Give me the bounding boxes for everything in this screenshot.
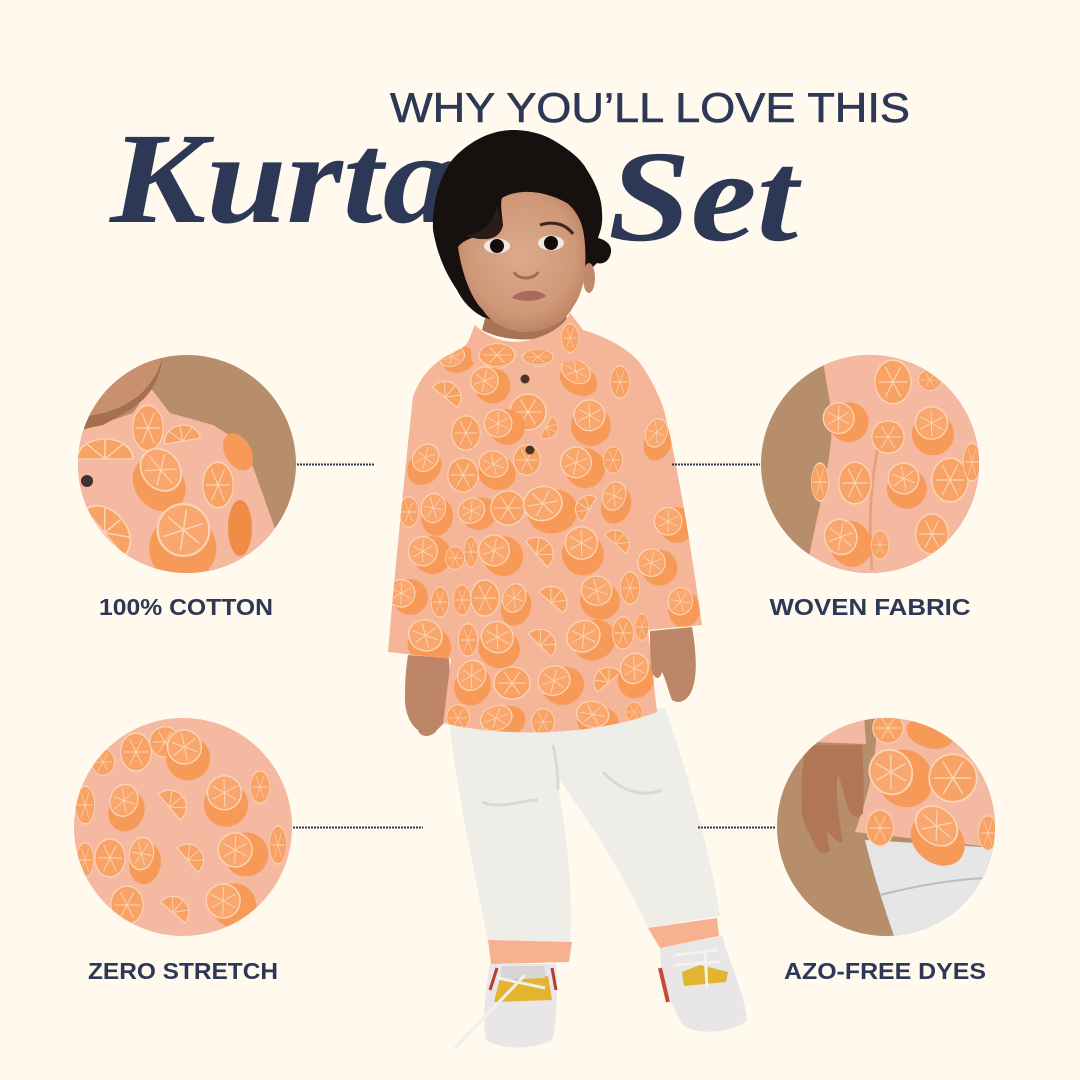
circle detail: flat fabric xyxy=(74,718,292,936)
connector line xyxy=(297,464,375,466)
left pant cuff xyxy=(488,940,572,964)
right shoe xyxy=(660,936,747,1032)
right eyebrow xyxy=(540,223,573,234)
nose xyxy=(514,272,538,278)
circle detail: collar fabric xyxy=(78,355,296,573)
label: 100% COTTON xyxy=(99,594,273,620)
panel: zero stretch xyxy=(70,715,423,984)
mouth xyxy=(512,291,546,301)
kurta xyxy=(388,313,702,732)
title: Kurta: Kurta xyxy=(109,107,455,251)
label: ZERO STRETCH xyxy=(88,958,278,984)
ear xyxy=(583,263,595,293)
left hand xyxy=(405,655,450,736)
white pants xyxy=(450,708,720,944)
panel: azo-free dyes xyxy=(698,712,1002,984)
collar xyxy=(471,313,583,366)
connector line xyxy=(698,826,776,828)
label: AZO-FREE DYES xyxy=(784,958,986,984)
title: why you'll love this: WHY YOU’LL LOVE THIS xyxy=(390,84,910,131)
child figure xyxy=(382,130,747,1048)
fringe strand xyxy=(466,205,503,239)
face xyxy=(458,192,585,332)
connector line xyxy=(672,464,760,466)
eyes xyxy=(484,236,564,254)
collar slices xyxy=(479,324,579,366)
panel: woven fabric xyxy=(672,350,990,620)
kurta buttons xyxy=(520,374,534,454)
circle detail: hem and hand xyxy=(777,718,995,936)
connector line xyxy=(293,826,423,828)
hair xyxy=(433,130,611,325)
panel: 100% cotton xyxy=(70,350,375,620)
right pant cuff xyxy=(648,918,719,948)
fabric print xyxy=(382,340,703,745)
neck xyxy=(482,300,568,339)
title: Set: Set xyxy=(608,125,802,269)
right hand xyxy=(650,627,696,702)
left shoe xyxy=(455,964,557,1048)
label: WOVEN FABRIC xyxy=(770,594,970,620)
circle detail: sleeve fabric xyxy=(761,355,979,573)
